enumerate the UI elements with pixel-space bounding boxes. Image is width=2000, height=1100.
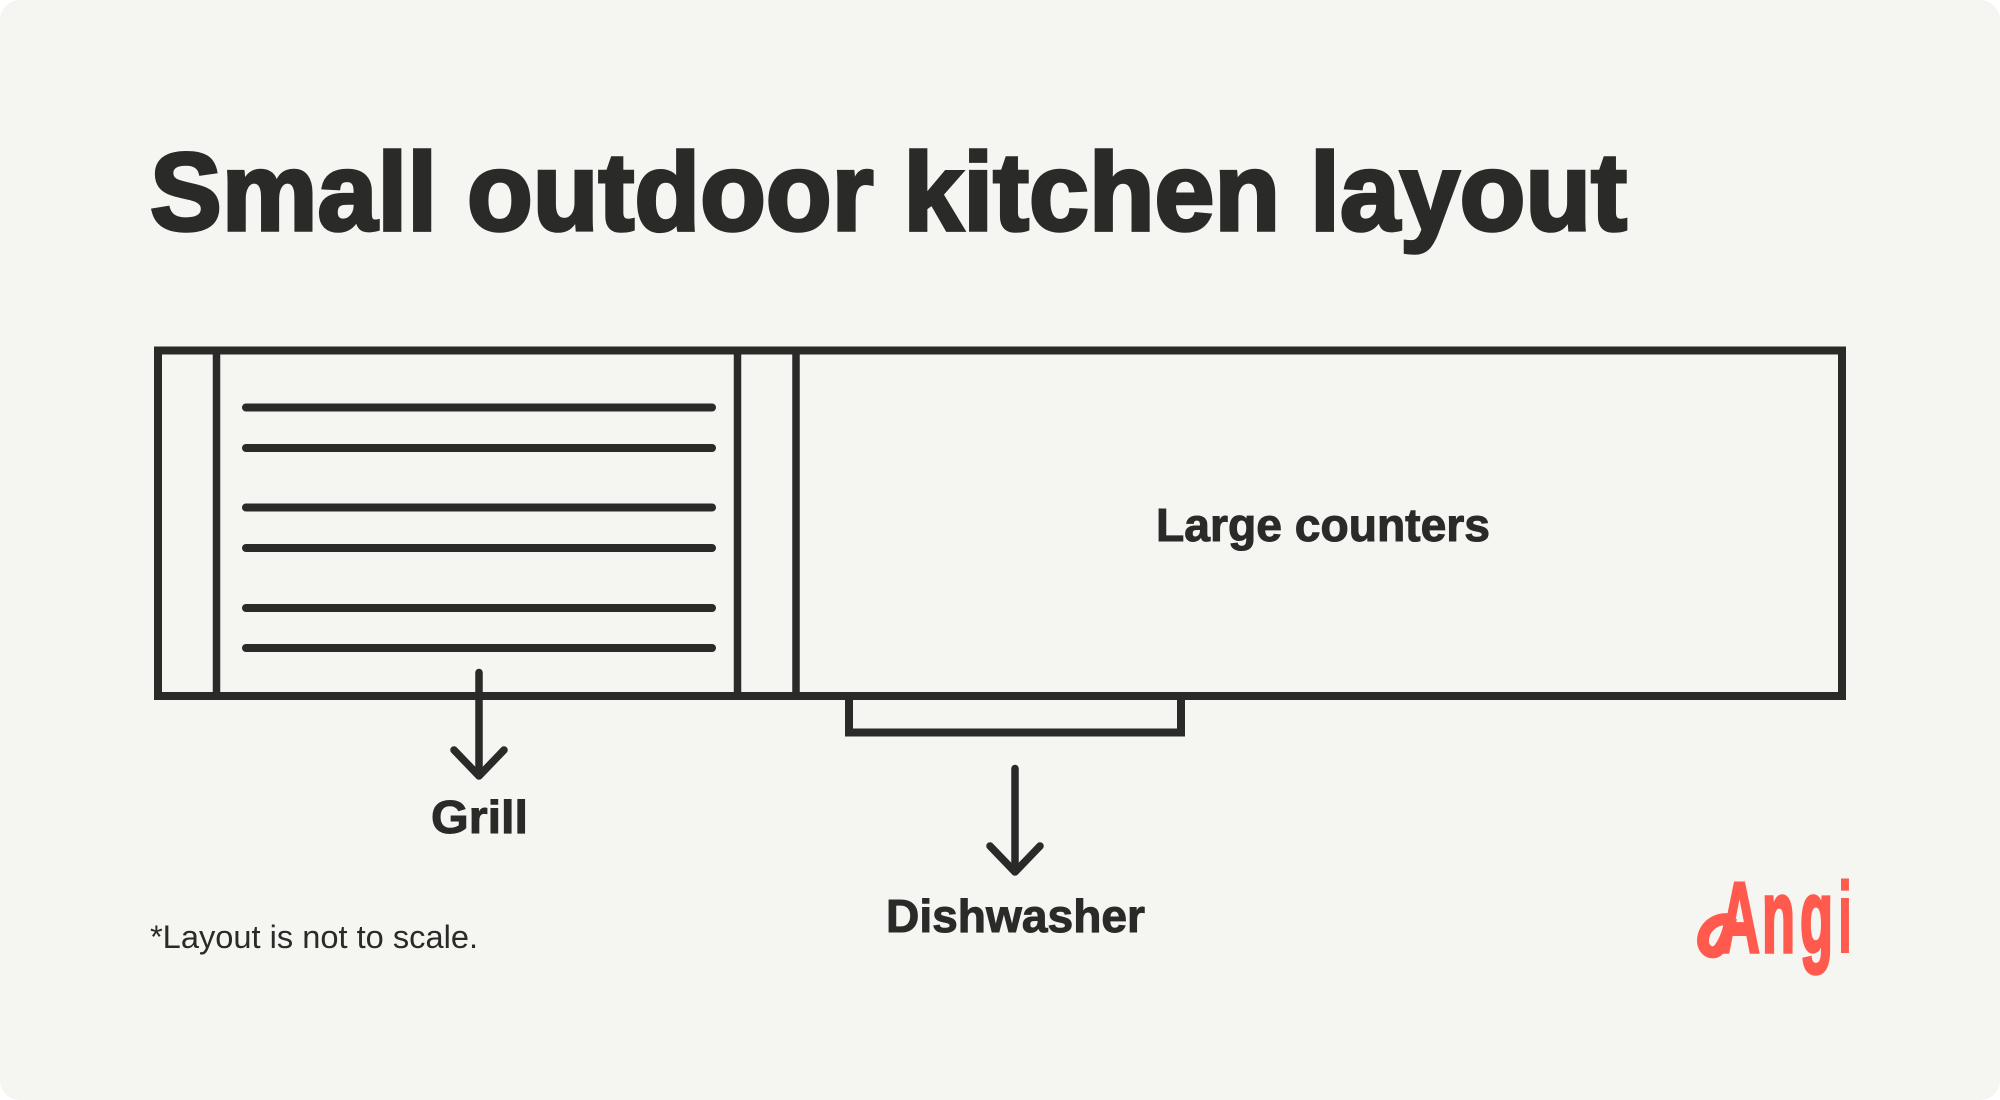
arrow: dishwasher xyxy=(990,768,1040,872)
label: grill: Grill xyxy=(431,791,528,843)
label: dishwasher: Dishwasher xyxy=(886,890,1145,942)
kitchen layout diagram xyxy=(158,350,1842,732)
title: Small outdoor kitchen layout xyxy=(150,131,1627,254)
footnote: *Layout is not to scale. xyxy=(150,919,478,955)
logo wordmark rest: g xyxy=(1800,859,1833,975)
logo wordmark: A xyxy=(1719,862,1760,974)
logo: Angi xyxy=(1703,859,1852,975)
grill grates xyxy=(246,408,712,648)
grill section dividers xyxy=(216,350,796,696)
counter outline xyxy=(158,350,1842,696)
logo swash xyxy=(1703,918,1733,952)
label: large counters: Large counters xyxy=(1156,499,1490,551)
dishwasher outline xyxy=(849,696,1181,732)
logo wordmark rest: n xyxy=(1762,859,1795,975)
logo wordmark rest: i xyxy=(1838,862,1852,974)
arrow: grill xyxy=(454,672,504,776)
